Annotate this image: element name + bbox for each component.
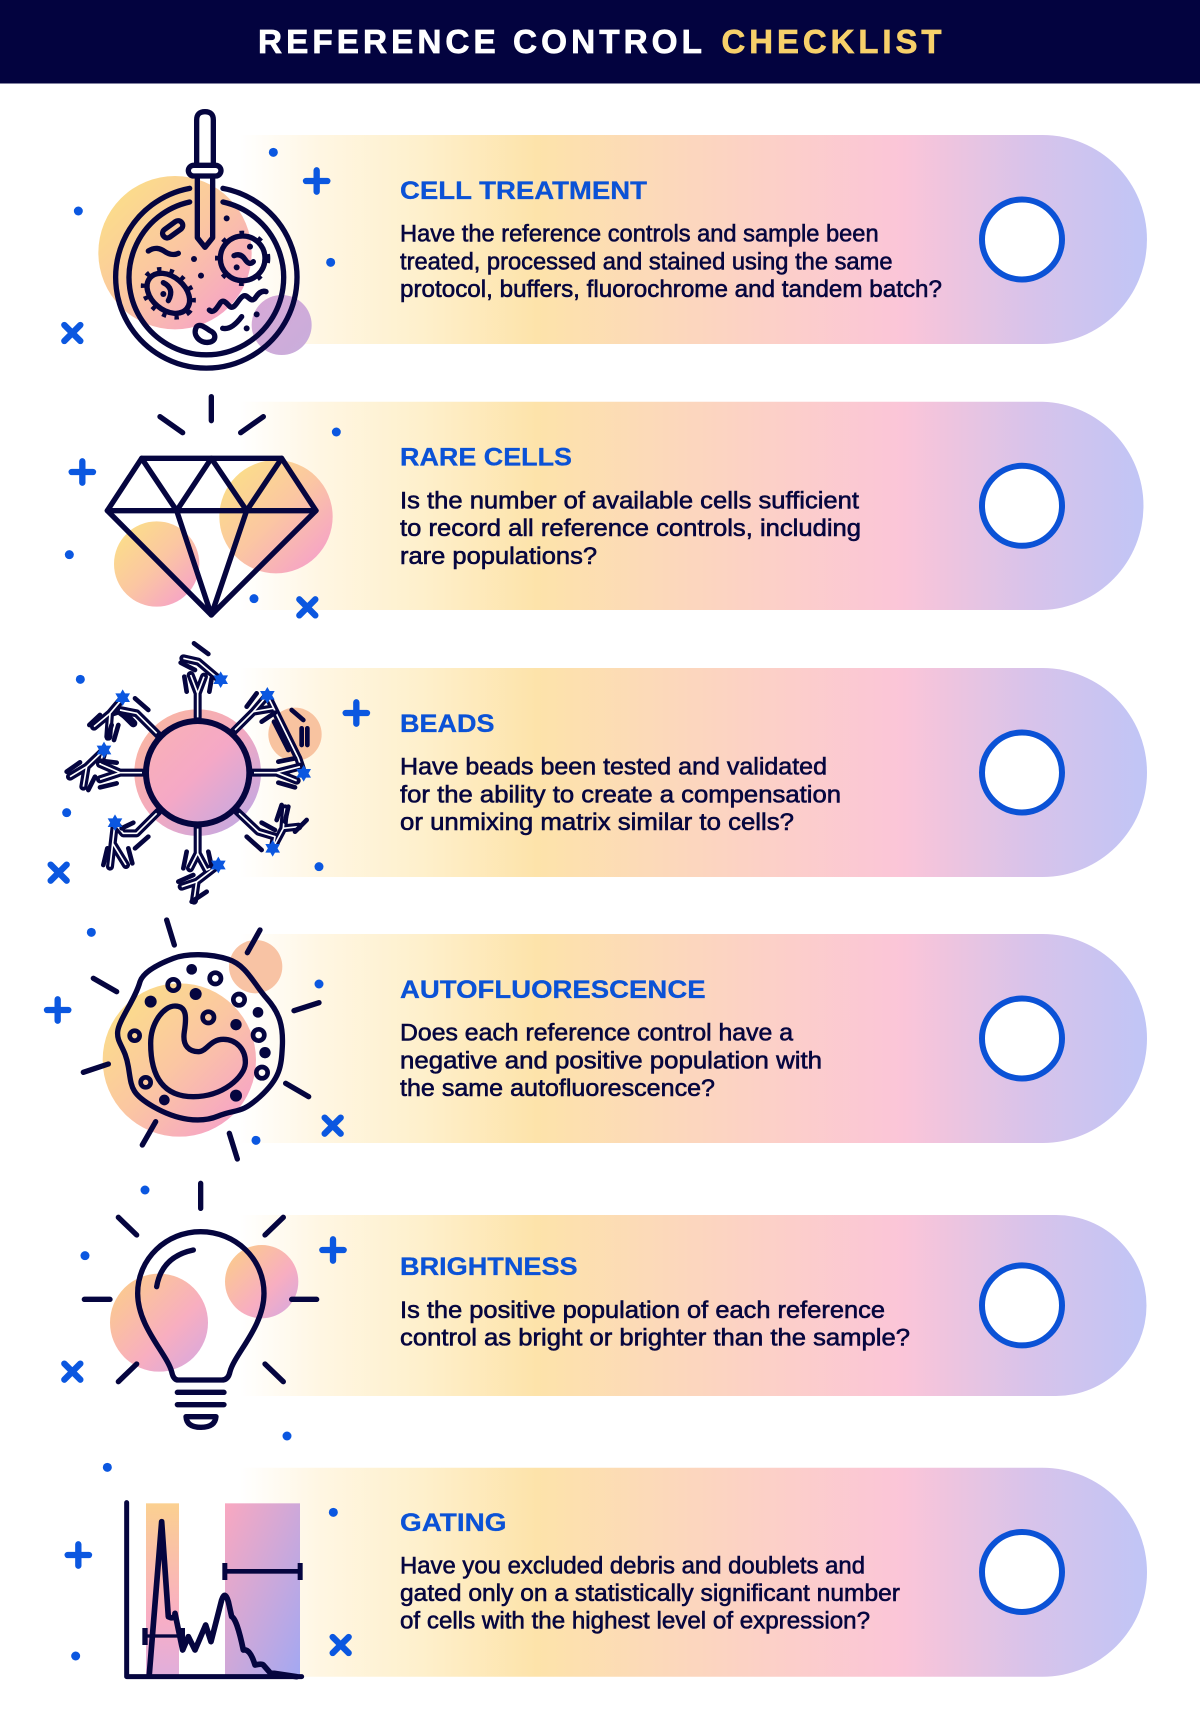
body text: of cells with the highest level of expression? [400, 1608, 870, 1635]
heading: GATING [400, 1509, 506, 1537]
title [258, 23, 946, 60]
sparkle marks [47, 928, 341, 1145]
icon: autofluorescent cell [47, 920, 341, 1159]
panel: rare cells [240, 402, 1143, 610]
body text [400, 487, 861, 570]
title: CHECKLIST [722, 23, 946, 60]
panel: brightness [240, 1215, 1146, 1396]
body text: Is the positive population of each reference [400, 1297, 885, 1324]
heading: CELL TREATMENT [400, 177, 647, 205]
checkbox [982, 998, 1062, 1078]
body text [400, 754, 841, 836]
body text: Does each reference control have a [400, 1020, 794, 1047]
header bar [0, 0, 1200, 84]
body text: rare populations? [400, 543, 597, 570]
sparkle marks [68, 1463, 349, 1660]
title: REFERENCE CONTROL [258, 23, 706, 60]
heading: AUTOFLUORESCENCE [400, 976, 706, 1004]
sparkle marks [65, 427, 341, 615]
body text: Have beads been tested and validated [400, 754, 827, 781]
body text [400, 221, 942, 303]
body text [400, 1020, 822, 1102]
icon: petri dish with dropper [64, 112, 335, 368]
body text: control as bright or brighter than the sample? [400, 1325, 910, 1352]
sparkle marks [51, 675, 367, 881]
body text: Is the number of available cells sufficient [400, 487, 859, 514]
body text: treated, processed and stained using the same [400, 248, 892, 275]
icon: light bulb [64, 1183, 344, 1440]
panel: autofluorescence [240, 934, 1147, 1143]
checkbox [982, 466, 1062, 546]
checkbox [982, 1532, 1062, 1612]
icon: diamond [65, 397, 341, 615]
heading: RARE CELLS [400, 444, 572, 472]
panel: gating [240, 1468, 1147, 1677]
body text: gated only on a statistically significant number [400, 1580, 900, 1607]
sparkle marks [64, 1185, 344, 1440]
panel: beads [240, 668, 1147, 877]
checkbox [982, 200, 1062, 280]
body text: Have the reference controls and sample been [400, 221, 879, 248]
heading: BEADS [400, 710, 494, 738]
sparkle marks [64, 148, 335, 341]
body text: for the ability to create a compensation [400, 781, 841, 808]
body text: to record all reference controls, including [400, 515, 861, 542]
body text: protocol, buffers, fluorochrome and tandem batch? [400, 276, 942, 303]
icon: gating histogram [68, 1463, 349, 1677]
checkbox [982, 732, 1062, 812]
icon: bead with antibodies [51, 643, 367, 902]
panel: cell treatment [240, 135, 1147, 344]
body text [400, 1552, 900, 1635]
body text [400, 1297, 910, 1352]
body text: negative and positive population with [400, 1047, 822, 1074]
antibody stars [97, 671, 311, 873]
checkbox [982, 1265, 1062, 1345]
body text: or unmixing matrix similar to cells? [400, 809, 794, 836]
body text: Have you excluded debris and doublets and [400, 1552, 865, 1579]
body text: the same autofluorescence? [400, 1075, 715, 1102]
heading: BRIGHTNESS [400, 1253, 578, 1281]
